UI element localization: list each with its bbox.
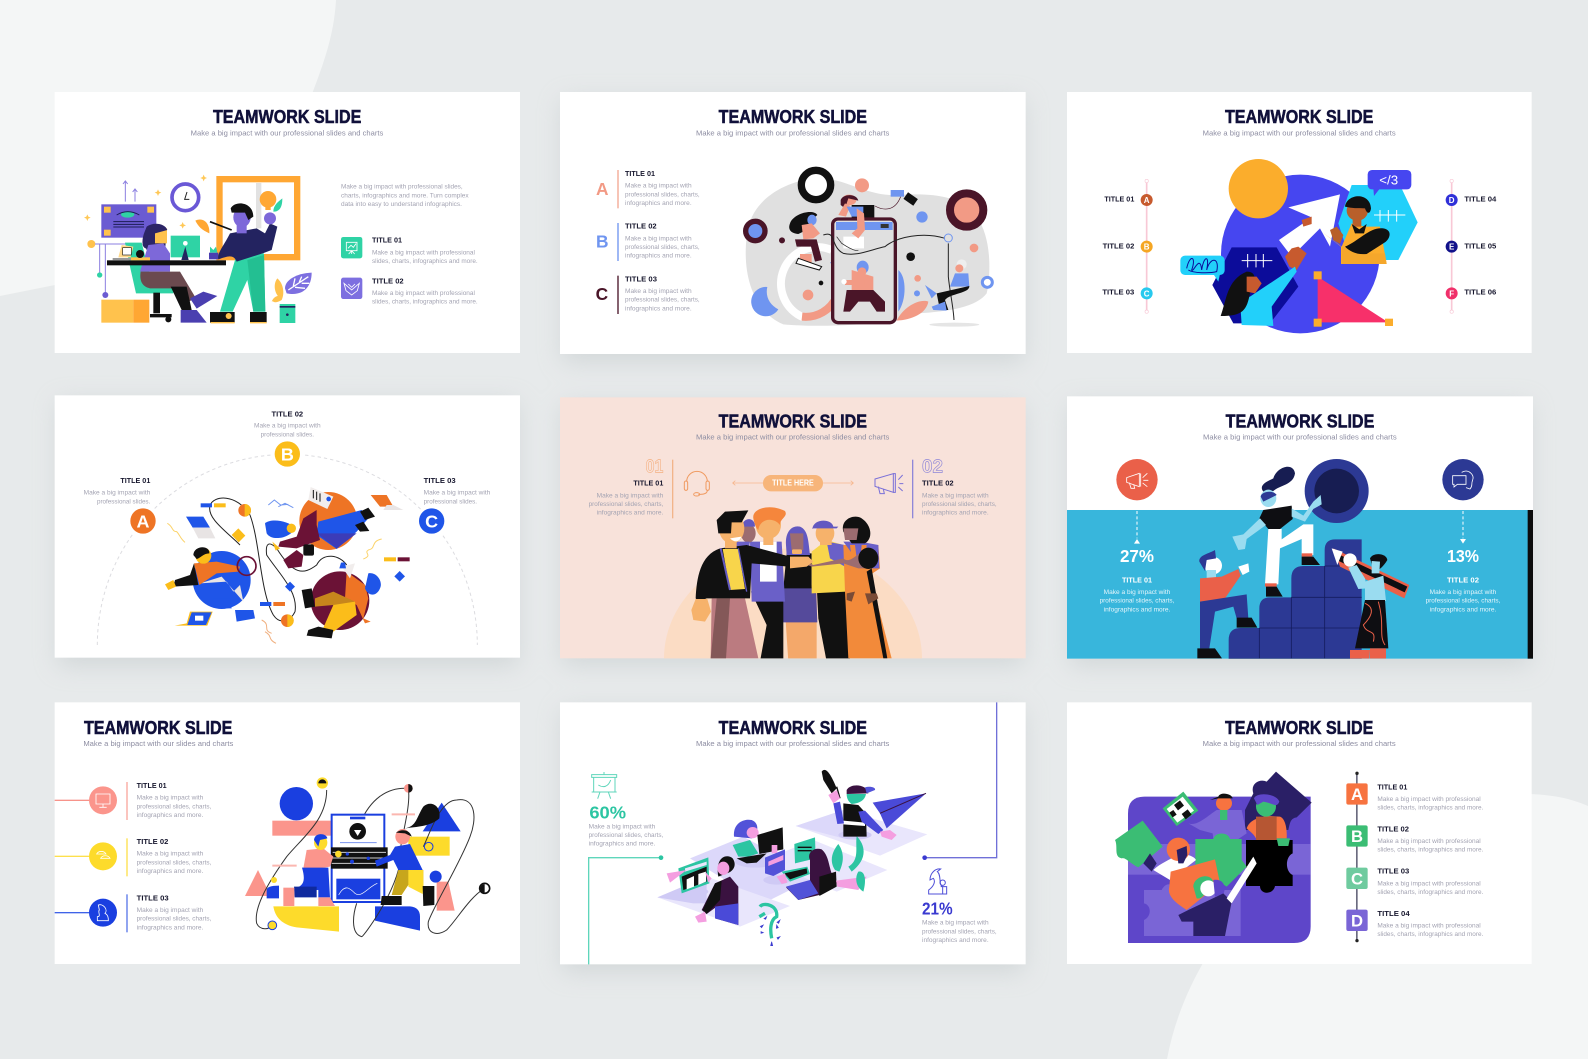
stat 60%: professional slides, charts, bbox=[589, 832, 664, 839]
right timeline: TITLE 04 bbox=[1464, 195, 1497, 204]
step A bbox=[1346, 782, 1484, 812]
step B: Make a big impact with professional bbox=[1377, 838, 1481, 845]
heading: TEAMWORK SLIDE bbox=[1225, 106, 1373, 127]
step D: D bbox=[1351, 911, 1363, 930]
item 3: Make a big impact with bbox=[137, 907, 204, 914]
intro text: charts, infographics and more. Turn complex bbox=[341, 192, 469, 199]
step A: A bbox=[1351, 785, 1363, 804]
item 2: Make a big impact with bbox=[137, 851, 204, 858]
heading: TEAMWORK SLIDE bbox=[84, 717, 232, 738]
item C: C bbox=[596, 284, 609, 304]
intro text: Make a big impact with professional slides, bbox=[341, 184, 463, 191]
icon: headset bbox=[684, 471, 709, 496]
illustration: floating team bbox=[165, 487, 410, 643]
node A bbox=[84, 476, 159, 537]
item 02: TITLE 02 bbox=[922, 479, 954, 488]
stat 13%: 13% bbox=[1447, 546, 1479, 566]
node C bbox=[415, 476, 491, 537]
stat 21%: infographics and more. bbox=[922, 937, 989, 944]
item 02: infographics and more. bbox=[922, 510, 989, 517]
stat 60%: Make a big impact with bbox=[589, 823, 656, 830]
background arc bbox=[664, 548, 922, 658]
step B bbox=[1346, 824, 1484, 854]
node C: professional slides. bbox=[424, 498, 477, 505]
item 3 bbox=[55, 893, 212, 932]
item 3: TITLE 03 bbox=[137, 893, 169, 902]
illustration: puzzle team bbox=[1115, 772, 1315, 943]
right timeline: TITLE 05 bbox=[1464, 241, 1497, 250]
heading: TEAMWORK SLIDE bbox=[213, 106, 361, 127]
item 1: professional slides, charts, bbox=[137, 803, 212, 810]
icon: chess knight bbox=[929, 869, 947, 894]
item A bbox=[596, 169, 700, 208]
item: title 01: TITLE 01 bbox=[372, 236, 403, 245]
right timeline: D bbox=[1449, 196, 1455, 205]
illustration: arrow collaboration bbox=[1180, 159, 1418, 333]
stat 27%: 27% bbox=[1120, 546, 1154, 566]
item 2: TITLE 02 bbox=[137, 837, 168, 846]
item: title 02 bbox=[341, 276, 478, 306]
node A: A bbox=[136, 512, 149, 532]
subheading: Make a big impact with our professional slides and charts bbox=[696, 128, 889, 137]
heading: TEAMWORK SLIDE bbox=[719, 717, 867, 738]
left timeline: A bbox=[1144, 196, 1150, 205]
item 02: 02 bbox=[922, 456, 943, 477]
blue band bbox=[1067, 510, 1533, 659]
item: title 02: Make a big impact with professional bbox=[372, 290, 475, 297]
node C: Make a big impact with bbox=[424, 490, 491, 497]
dashed arc bbox=[97, 454, 477, 645]
panel 3: six titles with arrow illustration bbox=[1067, 92, 1532, 353]
item 02: Make a big impact with bbox=[922, 492, 989, 499]
item 01: Make a big impact with bbox=[597, 492, 664, 499]
item C: professional slides, charts, bbox=[625, 297, 700, 304]
subheading: Make a big impact with our professional slides and charts bbox=[1203, 128, 1396, 137]
item 02 bbox=[912, 456, 997, 518]
step C: slides, charts, infographics and more. bbox=[1377, 889, 1484, 896]
item 1: TITLE 01 bbox=[137, 781, 167, 790]
left timeline: B bbox=[1144, 243, 1150, 252]
title pill with arrows: TITLE HERE bbox=[772, 478, 814, 488]
illustration: phone team bbox=[746, 170, 992, 327]
item 1 bbox=[55, 781, 212, 820]
stat 21%: 21% bbox=[922, 899, 953, 919]
right timeline: TITLE 06 bbox=[1464, 288, 1496, 297]
subheading: Make a big impact with our professional slides and charts bbox=[696, 739, 889, 748]
panel 1: desk scene with two titles bbox=[55, 92, 520, 353]
step A: slides, charts, infographics and more. bbox=[1377, 805, 1484, 812]
stat 27%: Make a big impact with bbox=[1104, 589, 1171, 596]
intro text: data into easy to understand infographics. bbox=[341, 201, 462, 208]
stat 27%: infographics and more. bbox=[1104, 607, 1171, 614]
node A: TITLE 01 bbox=[120, 476, 151, 485]
item 1: infographics and more. bbox=[137, 812, 204, 819]
stat 27% bbox=[1100, 459, 1175, 614]
subheading: Make a big impact with our professional slides and charts bbox=[1203, 739, 1396, 748]
stat 21%: professional slides, charts, bbox=[922, 928, 997, 935]
item B: infographics and more. bbox=[625, 253, 692, 260]
intro text bbox=[341, 184, 469, 208]
item 2: professional slides, charts, bbox=[137, 859, 212, 866]
step D: TITLE 04 bbox=[1377, 909, 1410, 918]
item 01: professional slides, charts, bbox=[589, 501, 664, 508]
node C: TITLE 03 bbox=[424, 476, 456, 485]
panel 9: puzzle with four steps bbox=[1067, 702, 1532, 964]
stat 21% bbox=[922, 899, 997, 944]
item B bbox=[596, 222, 700, 261]
panel shadows bbox=[58, 100, 1530, 972]
stat 60%: 60% bbox=[589, 803, 626, 823]
panel 2: A B C with phone illustration bbox=[560, 92, 1026, 354]
illustration: stair climbing bbox=[1197, 459, 1409, 659]
illustration: team huddle bbox=[691, 507, 892, 662]
heading: TEAMWORK SLIDE bbox=[719, 106, 867, 127]
panel 6: blue stats with blocks bbox=[1067, 396, 1533, 659]
item B: B bbox=[596, 232, 609, 252]
panel 8: isometric workspace stats bbox=[560, 702, 1026, 964]
item A: infographics and more. bbox=[625, 200, 692, 207]
step C: C bbox=[1351, 869, 1363, 888]
step C: Make a big impact with professional bbox=[1377, 880, 1481, 887]
item C: Make a big impact with bbox=[625, 288, 692, 295]
step D: slides, charts, infographics and more. bbox=[1377, 931, 1484, 938]
vertical timeline bbox=[1355, 772, 1359, 942]
heading: TEAMWORK SLIDE bbox=[1226, 410, 1374, 431]
item 01: infographics and more. bbox=[597, 510, 664, 517]
panel 5: peach team huddle bbox=[560, 397, 1026, 662]
item 01 bbox=[589, 456, 673, 518]
item A: Make a big impact with bbox=[625, 183, 692, 190]
right timeline bbox=[1446, 179, 1497, 313]
item B: TITLE 02 bbox=[625, 222, 657, 231]
item 2: infographics and more. bbox=[137, 868, 204, 875]
item 01: TITLE 01 bbox=[633, 479, 664, 488]
item C: infographics and more. bbox=[625, 305, 692, 312]
node B bbox=[254, 409, 321, 470]
subheading: Make a big impact with our slides and charts bbox=[83, 739, 233, 748]
node B: B bbox=[281, 445, 294, 465]
heading: TEAMWORK SLIDE bbox=[719, 410, 867, 431]
item 01: 01 bbox=[646, 456, 663, 477]
heading: TEAMWORK SLIDE bbox=[1225, 717, 1373, 738]
background blob: bottom right bbox=[1167, 794, 1588, 1059]
item C: TITLE 03 bbox=[625, 274, 657, 283]
item B: professional slides, charts, bbox=[625, 244, 700, 251]
right timeline: F bbox=[1449, 289, 1454, 298]
stat 13%: infographics and more. bbox=[1430, 607, 1497, 614]
right timeline: E bbox=[1449, 243, 1455, 252]
item 2 bbox=[55, 837, 212, 876]
title pill with arrows bbox=[733, 475, 853, 491]
stat 27%: TITLE 01 bbox=[1122, 575, 1153, 584]
item 1: Make a big impact with bbox=[137, 795, 204, 802]
left timeline: TITLE 01 bbox=[1104, 195, 1135, 204]
item: title 02: slides, charts, infographics and more. bbox=[372, 299, 478, 306]
node A: professional slides. bbox=[97, 498, 151, 505]
item A: professional slides, charts, bbox=[625, 191, 700, 198]
item: title 02: TITLE 02 bbox=[372, 276, 404, 285]
illustration: isometric team bbox=[657, 770, 927, 946]
step B: B bbox=[1351, 827, 1363, 846]
item: title 01: slides, charts, infographics and more. bbox=[372, 258, 478, 265]
left timeline: C bbox=[1144, 289, 1150, 298]
subheading: Make a big impact with our professional slides and charts bbox=[696, 433, 889, 442]
icon: megaphone bbox=[875, 474, 903, 494]
step C: TITLE 03 bbox=[1377, 867, 1409, 876]
stat 27%: professional slides, charts, bbox=[1100, 598, 1175, 605]
connector: purple bbox=[922, 702, 997, 860]
subheading: Make a big impact with our professional slides and charts bbox=[191, 128, 383, 137]
item B: Make a big impact with bbox=[625, 235, 692, 242]
item: title 01 bbox=[341, 236, 478, 265]
node A: Make a big impact with bbox=[84, 490, 151, 497]
background blob: top left bbox=[0, 0, 336, 296]
panel 4: semicircle A B C bbox=[55, 395, 520, 658]
node C: C bbox=[425, 512, 438, 532]
item A: A bbox=[596, 179, 609, 199]
step B: TITLE 02 bbox=[1377, 824, 1409, 833]
item A: TITLE 01 bbox=[625, 169, 656, 178]
illustration: office desk bbox=[84, 175, 312, 323]
item 3: infographics and more. bbox=[137, 924, 204, 931]
panel 7: three titles with abacus illustration bbox=[55, 702, 520, 964]
step D bbox=[1346, 909, 1484, 938]
stat 13%: Make a big impact with bbox=[1430, 589, 1497, 596]
step A: Make a big impact with professional bbox=[1377, 796, 1481, 803]
left timeline: TITLE 03 bbox=[1102, 288, 1134, 297]
step D: Make a big impact with professional bbox=[1377, 922, 1481, 929]
step B: slides, charts, infographics and more. bbox=[1377, 847, 1484, 854]
left timeline: TITLE 02 bbox=[1103, 241, 1134, 250]
left timeline bbox=[1102, 179, 1153, 313]
stat 13% bbox=[1426, 459, 1501, 614]
stat 60%: infographics and more. bbox=[589, 841, 656, 848]
step C bbox=[1346, 867, 1484, 896]
stat 13%: TITLE 02 bbox=[1447, 575, 1479, 584]
stat 21%: Make a big impact with bbox=[922, 919, 989, 926]
icon: presentation board bbox=[592, 772, 617, 799]
node B: Make a big impact with bbox=[254, 423, 321, 430]
step A: TITLE 01 bbox=[1377, 782, 1408, 791]
node B: TITLE 02 bbox=[271, 409, 303, 418]
illustration: abacus team bbox=[245, 777, 490, 937]
stat 13%: professional slides, charts, bbox=[1426, 598, 1501, 605]
stat 60% bbox=[589, 803, 664, 848]
item C bbox=[596, 274, 700, 314]
item 02: professional slides, charts, bbox=[922, 501, 997, 508]
node B: professional slides. bbox=[261, 432, 314, 439]
connector: teal bbox=[589, 855, 663, 964]
illustration: arrow collaboration: </3 bbox=[1379, 173, 1398, 188]
item: title 01: Make a big impact with professional bbox=[372, 249, 475, 256]
item 3: professional slides, charts, bbox=[137, 916, 212, 923]
subheading: Make a big impact with our professional slides and charts bbox=[1203, 433, 1397, 442]
